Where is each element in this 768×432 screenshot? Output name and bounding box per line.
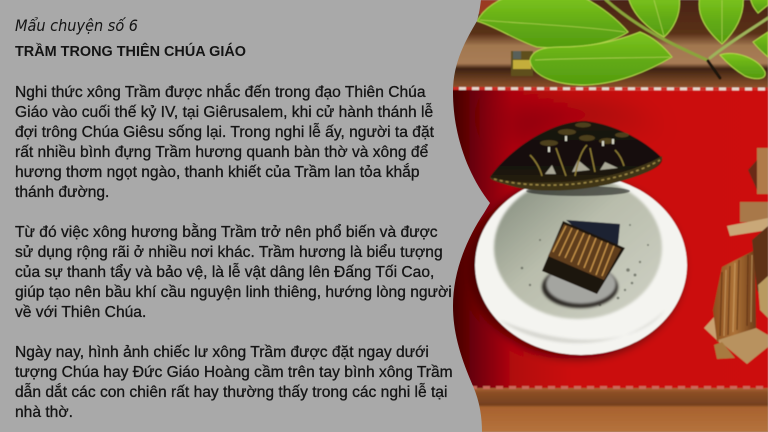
paragraph 1: đợi trông Chúa Giêsu sống lại. Trong nghi lễ ấy, người ta đặt (15, 122, 435, 141)
paragraph 2 (15, 222, 452, 321)
lid (490, 121, 662, 196)
paragraph 2: về với Thiên Chúa. (15, 304, 146, 321)
paragraph 1: rất nhiều bình đựng Trầm hương quanh bàn thờ và xông để (15, 143, 428, 161)
stems (606, 0, 768, 78)
paragraph 2: giúp tạo nên bầu khí cầu nguyện linh thiêng, hướng lòng người (15, 284, 452, 301)
lower wooden frame (440, 388, 768, 432)
paragraph 3 (15, 344, 453, 421)
red velvet lining (440, 88, 768, 388)
brass hinge (511, 51, 533, 76)
paragraph 1: Nghi thức xông Trầm được nhắc đến trong đạo Thiên Chúa (15, 82, 426, 101)
paragraph 2: sử dụng rộng rãi ở nhiều nơi khác. Trầm hương là biểu tượng (15, 243, 443, 261)
paragraph 1: thánh đường. (15, 184, 109, 201)
wooden box top (440, 0, 768, 88)
leaves (477, 0, 768, 85)
bowl (469, 175, 687, 360)
photo: incense bowl on red box (440, 0, 768, 432)
paragraph 2: Từ đó việc xông hương bằng Trầm trở nên phổ biến và được (15, 222, 438, 241)
paragraph 2: của sự thanh tẩy và bảo vệ, là lễ vật dâng lên Đấng Tối Cao, (15, 262, 434, 281)
paragraph 3: Ngày nay, hình ảnh chiếc lư xông Trầm được đặt ngay dưới (15, 344, 429, 361)
paragraph 3: dẫn dắt các con chiên rất hay thường thấy trong các nghi lễ tại (15, 382, 447, 401)
stitching top (453, 87, 768, 90)
paragraph 1: Giáo vào cuối thế kỷ IV, tại Giêrusalem, khi cử hành thánh lễ (15, 102, 433, 121)
paragraph 3: nhà thờ. (15, 404, 73, 421)
paragraph 1: hương thơm ngọt ngào, thanh khiết của Trầm lan tỏa khắp (15, 162, 420, 181)
grey text panel with wavy edge (0, 0, 490, 432)
wood chips (704, 148, 768, 364)
paragraph 3: tượng Chúa hay Đức Giáo Hoàng cầm trên tay bình xông Trầm (15, 364, 453, 381)
agarwood piece (566, 220, 620, 245)
story label: Mẩu chuyện số 6 (15, 16, 138, 35)
stone under the agarwood (542, 266, 618, 308)
ash specks (521, 224, 649, 306)
paragraph 1 (15, 82, 435, 201)
heading: TRẦM TRONG THIÊN CHÚA GIÁO (15, 42, 246, 60)
